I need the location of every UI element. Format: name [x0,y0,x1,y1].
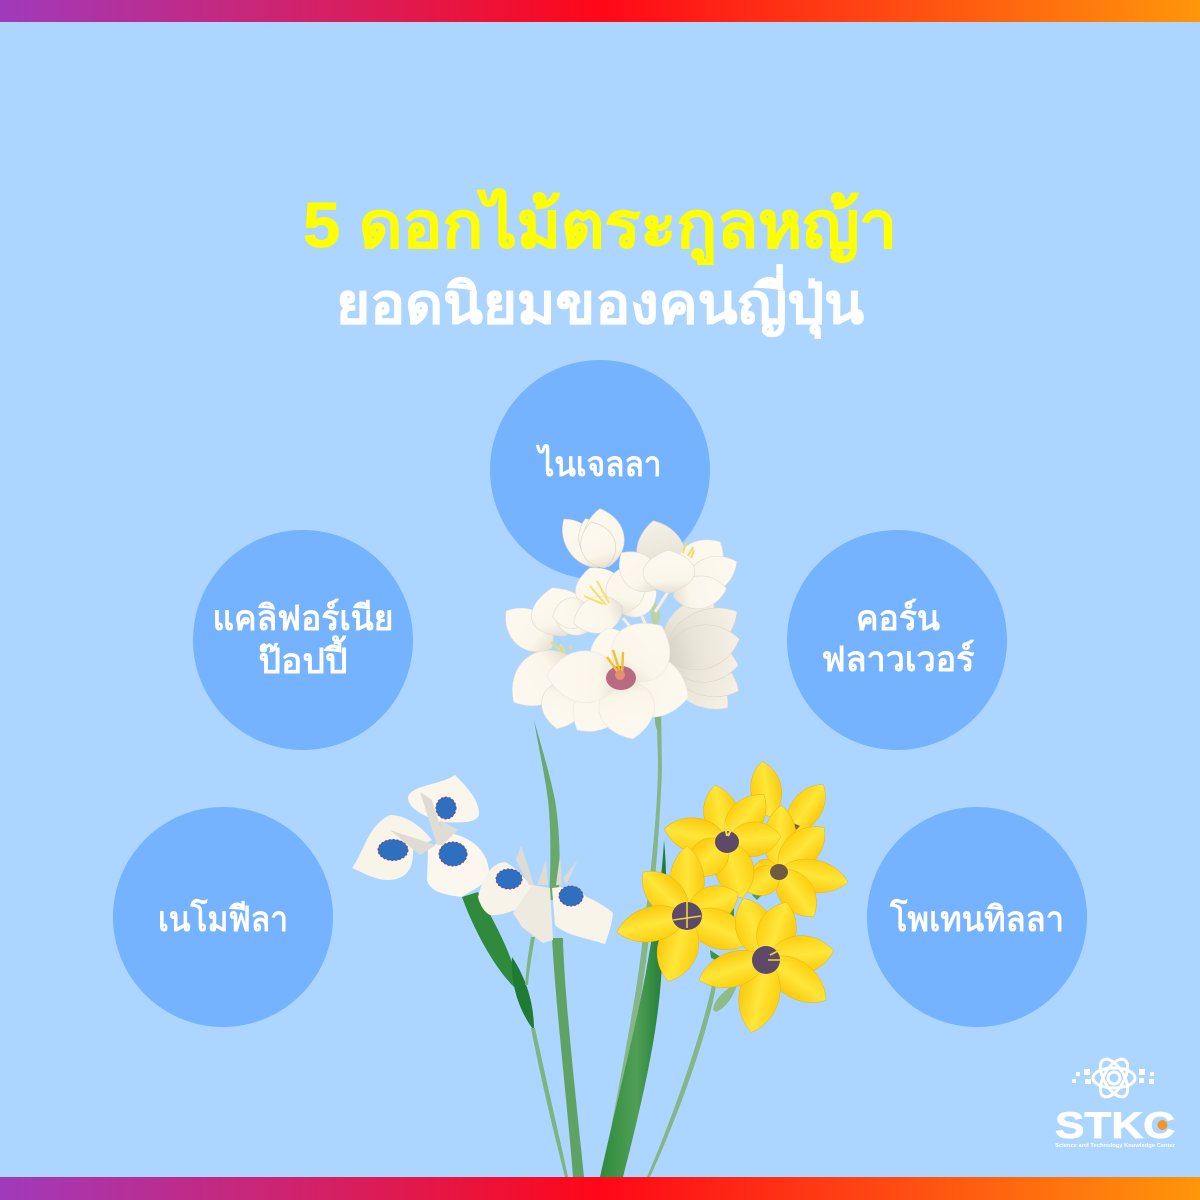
second iris petals [478,862,613,944]
flower C [740,804,851,927]
stamens front [607,650,623,675]
right back flower [650,585,748,724]
flower A center [715,831,739,853]
stamens upper middle [584,581,609,605]
circle: California poppy [193,530,413,750]
title line 1: 5 ดอกไม้ตระกูลหญ้า [303,188,897,265]
top gradient bar [0,0,1200,22]
logo atom icon [1093,1055,1135,1101]
circle: California poppy: แคลิฟอร์เนีย [212,598,394,638]
title [303,188,897,339]
logo orange dot [1158,1120,1168,1130]
front flower [546,608,696,746]
circle: Cornflower: คอร์น [856,598,940,638]
STKC logo [1055,1055,1175,1149]
iris eyes [378,797,467,866]
stamens left [551,642,571,653]
flower D center [752,946,780,974]
circle: Cornflower: ฟลาวเวอร์ [822,639,975,679]
logo wordmark: STKC [1055,1105,1175,1146]
pale green bud [651,602,660,627]
circle: Nemophila [113,807,333,1027]
flower B center [672,902,702,930]
circle: Nemophila: เนโมฟีลา [158,898,288,939]
yellow flowers [613,759,851,1037]
buds [747,759,836,841]
circle: Potentilla [867,807,1087,1027]
circle: Nigella [490,360,710,580]
upper right petals [609,527,745,612]
flower D [694,891,836,1037]
title line 2: ยอดนิยมของคนญี่ปุ่น [336,264,864,339]
upper right flower [630,515,691,590]
pink center [606,666,636,690]
iris right petal [427,833,489,897]
circle: Potentilla: โพเทนทิลลา [889,898,1064,939]
flower A [661,782,783,903]
iris grey crest [390,792,458,855]
circle: Cornflower [787,530,1007,750]
flower C center [770,864,788,880]
white flower cluster [494,506,748,746]
stems and leaves [462,700,768,1177]
circle: California poppy: ป๊อปปี้ [258,635,348,681]
iris left petal [352,815,432,880]
logo pixel squares [1072,1069,1154,1084]
white stalks [623,592,668,634]
top bud [552,506,628,576]
bottom gradient bar [0,1177,1200,1200]
second iris crests [516,845,578,885]
left back flower [494,580,592,733]
flower bouquet illustration [352,506,851,1177]
circle: Nigella: ไนเจลลา [535,443,662,484]
flower B [613,846,757,987]
blue-eyed white iris flowers [352,775,613,944]
logo tagline: Science and Technology Knowledge Center [1055,1143,1175,1149]
upper middle flower [550,559,664,641]
iris top petal [408,775,479,822]
second iris eyes [496,869,583,906]
stamens upper right [683,543,694,558]
